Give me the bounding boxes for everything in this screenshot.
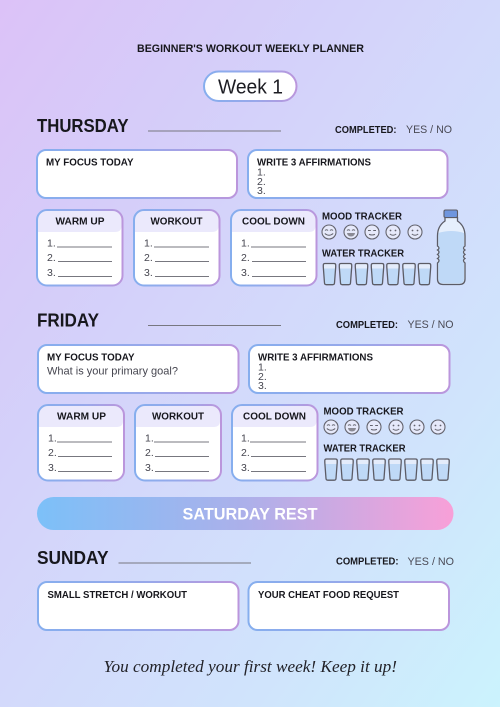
- box: workout: 2.: [145, 447, 154, 459]
- box: write 3 affirmations: WRITE 3 AFFIRMATIONS: [257, 156, 371, 168]
- panel: Sunday: [37, 547, 454, 630]
- box: write 3 affirmations: 2.: [257, 176, 266, 188]
- box: your cheat food request: YOUR CHEAT FOOD REQUEST: [258, 589, 400, 601]
- box: warm up: 1.: [47, 238, 56, 250]
- box: write 3 affirmations: [249, 345, 450, 393]
- completed: yes or no: COMPLETED:: [336, 556, 398, 568]
- week badge: Week 1: [218, 76, 283, 98]
- box: workout: 3.: [144, 267, 153, 279]
- box: my focus today with prompt: [38, 345, 238, 393]
- box: my focus today: [37, 150, 237, 198]
- box: warm up: 3.: [47, 267, 56, 279]
- box: cool down: 3.: [241, 267, 250, 279]
- panel: Friday: [37, 310, 454, 480]
- box: cool down: 1.: [241, 238, 250, 250]
- box: workout: 1.: [144, 238, 153, 250]
- box: my focus today with prompt: What is your primary goal?: [47, 366, 178, 378]
- box: small stretch / workout: SMALL STRETCH / WORKOUT: [48, 589, 188, 601]
- date line: [118, 562, 251, 564]
- box: cool down: COOL DOWN: [242, 216, 305, 228]
- panel: Thursday: [37, 115, 465, 286]
- water tracker: [322, 248, 431, 285]
- box: small stretch / workout: [38, 582, 238, 630]
- box: workout: WORKOUT: [152, 410, 205, 422]
- box: write 3 affirmations: 1.: [258, 362, 267, 374]
- box: write 3 affirmations: 3.: [258, 380, 267, 392]
- box: warm up: 3.: [48, 462, 57, 474]
- box: my focus today: MY FOCUS TODAY: [46, 156, 134, 168]
- completed: yes or no: COMPLETED:: [335, 124, 396, 136]
- box: write 3 affirmations: WRITE 3 AFFIRMATIONS: [258, 352, 373, 364]
- box: cool down: [231, 210, 316, 286]
- box: warm up: 2.: [47, 252, 56, 264]
- week badge: [204, 72, 296, 101]
- completed: yes or no: YES / NO: [408, 556, 454, 568]
- water tracker: WATER TRACKER: [322, 248, 404, 260]
- heading: Thursday: THURSDAY: [37, 115, 129, 136]
- box: workout: [134, 210, 220, 286]
- completed: yes or no: [336, 319, 454, 331]
- mood tracker: [324, 406, 445, 434]
- box: workout: 1.: [145, 432, 154, 444]
- box: workout: [135, 405, 221, 480]
- box: cool down: 2.: [241, 252, 250, 264]
- box: workout: WORKOUT: [150, 216, 203, 228]
- completed: yes or no: [336, 556, 454, 568]
- icon: water bottle: [438, 210, 465, 284]
- box: your cheat food request: [248, 582, 449, 630]
- water tracker: [324, 442, 449, 480]
- completed: yes or no: [335, 124, 452, 136]
- mood tracker: MOOD TRACKER: [324, 406, 404, 418]
- date line: [148, 324, 281, 326]
- banner: Saturday rest: [37, 497, 454, 530]
- box: cool down: 2.: [241, 447, 250, 459]
- box: warm up: [37, 210, 122, 286]
- mood tracker: [322, 210, 422, 239]
- box: warm up: WARM UP: [56, 216, 104, 228]
- box: write 3 affirmations: 1.: [257, 166, 266, 178]
- box: write 3 affirmations: 3.: [257, 185, 266, 197]
- box: my focus today with prompt: MY FOCUS TODAY: [47, 352, 134, 364]
- completed: yes or no: COMPLETED:: [336, 319, 398, 331]
- water tracker: WATER TRACKER: [324, 442, 406, 454]
- closing message: You completed your first week! Keep it up!: [104, 657, 397, 676]
- box: warm up: WARM UP: [57, 410, 106, 422]
- box: write 3 affirmations: [248, 150, 448, 198]
- completed: yes or no: YES / NO: [408, 319, 454, 331]
- title: BEGINNER'S WORKOUT WEEKLY PLANNER: [137, 43, 364, 55]
- date line: [148, 130, 281, 132]
- banner: Saturday rest: SATURDAY REST: [182, 504, 318, 524]
- box: cool down: 3.: [241, 462, 250, 474]
- completed: yes or no: YES / NO: [406, 124, 452, 136]
- heading: Friday: FRIDAY: [37, 310, 100, 330]
- box: warm up: [38, 405, 124, 480]
- heading: Sunday: SUNDAY: [37, 547, 109, 568]
- box: cool down: 1.: [241, 432, 250, 444]
- box: workout: 3.: [145, 462, 154, 474]
- box: cool down: COOL DOWN: [243, 410, 306, 422]
- box: write 3 affirmations: 2.: [258, 371, 267, 383]
- box: cool down: [232, 405, 318, 480]
- mood tracker: MOOD TRACKER: [322, 210, 402, 222]
- box: warm up: 1.: [48, 432, 57, 444]
- box: workout: 2.: [144, 252, 153, 264]
- box: warm up: 2.: [48, 447, 57, 459]
